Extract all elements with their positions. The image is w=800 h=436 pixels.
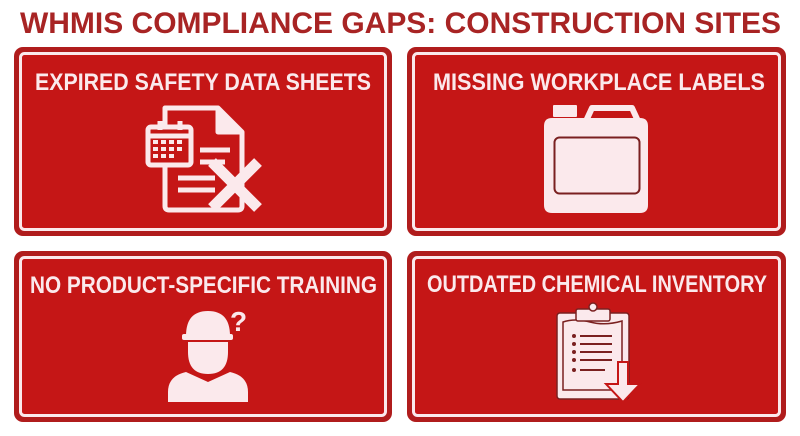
panel: outdated chemical inventory [407, 251, 786, 422]
heading: missing labels: MISSING WORKPLACE LABELS [433, 69, 765, 96]
title: WHMIS COMPLIANCE GAPS: CONSTRUCTION SITES [20, 7, 781, 40]
heading: expired SDS: EXPIRED SAFETY DATA SHEETS [35, 69, 371, 96]
panel: expired safety data sheets [14, 47, 392, 236]
panel: no product-specific training [14, 251, 392, 422]
icon: clipboard with down arrow [557, 303, 640, 402]
icon: worker with hard hat and question mark [168, 306, 248, 402]
panel: missing workplace labels [407, 47, 786, 236]
heading: training: NO PRODUCT-SPECIFIC TRAINING [30, 272, 377, 299]
icon: worker with hard hat and question mark: ? [230, 306, 247, 337]
icon: jerrycan [544, 105, 648, 213]
icon: document with calendar and X [148, 108, 258, 210]
